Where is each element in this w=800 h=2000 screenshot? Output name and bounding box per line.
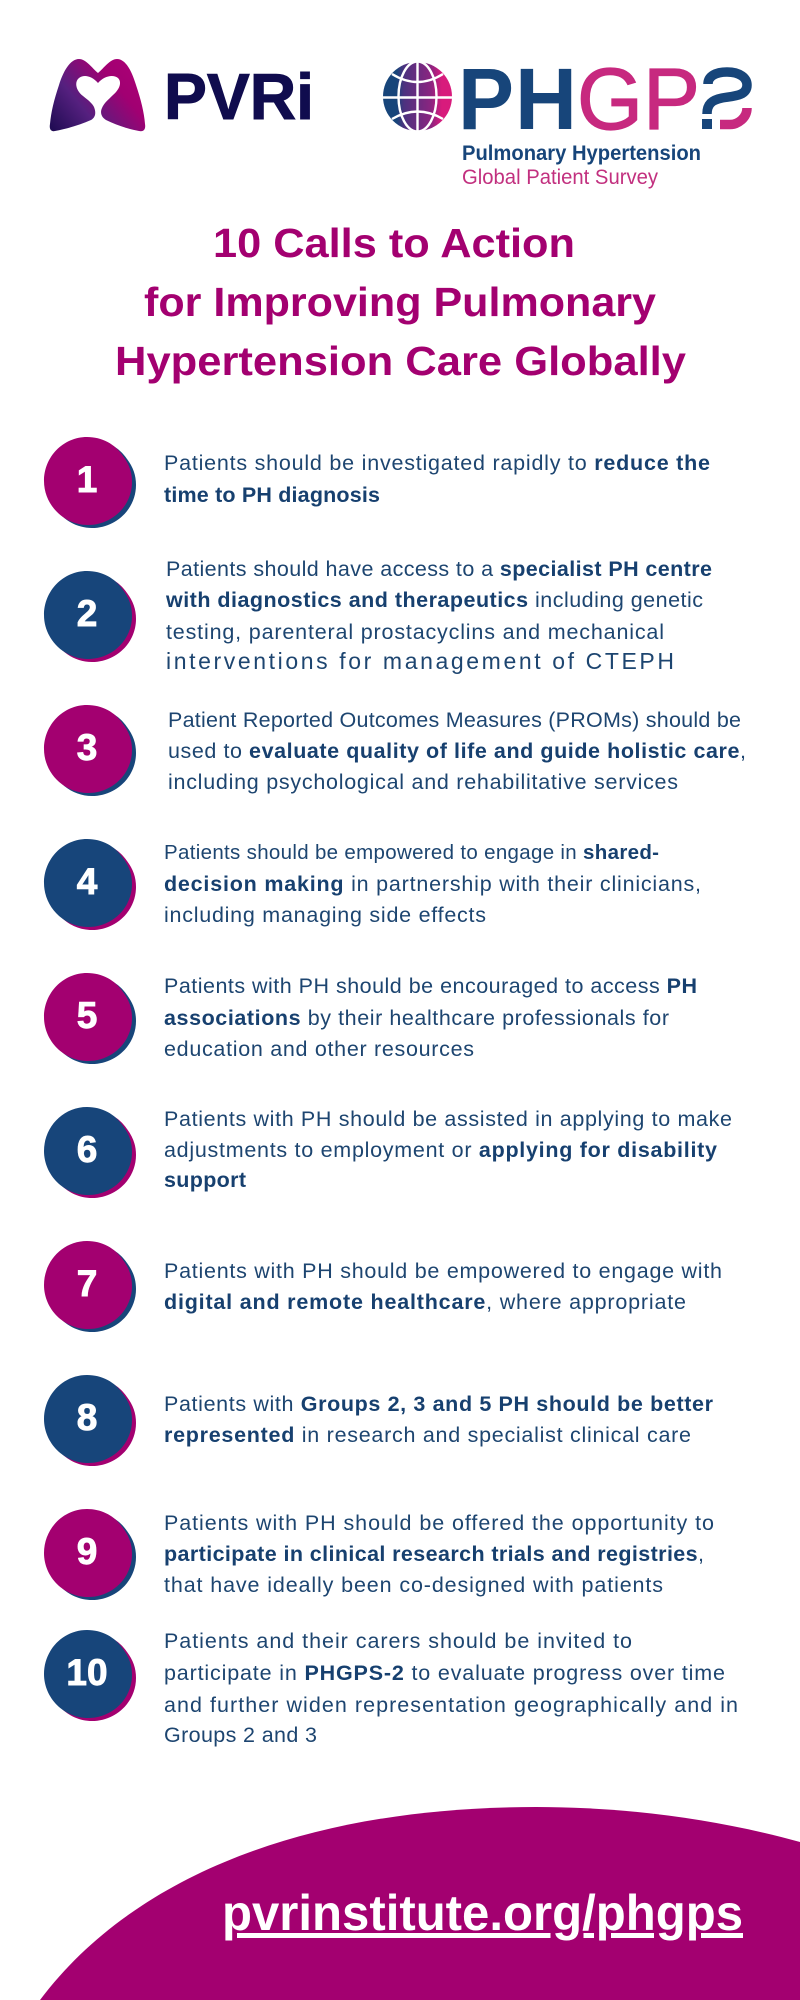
text 9 — [164, 1511, 714, 1597]
text 3: Patient Reported Outcomes Measures (PROMs) should be — [168, 708, 741, 732]
logo: PVRI: PVRi — [164, 60, 314, 133]
text 9: Patients with PH should be offered the opportunity to — [164, 1511, 714, 1535]
badge 5: 5 — [77, 995, 97, 1036]
call to action 7 — [44, 1241, 722, 1332]
text 5: associations by their healthcare professionals for — [164, 1006, 669, 1030]
text 4 — [164, 841, 701, 927]
badge 8 — [44, 1375, 136, 1466]
badge 10 — [44, 1630, 136, 1721]
call to action 9 — [44, 1509, 714, 1600]
text 3: used to evaluate quality of life and guide holistic care, — [168, 739, 746, 763]
text 6: support — [164, 1168, 246, 1192]
text 7 — [164, 1259, 722, 1314]
text 10: participate in PHGPS-2 to evaluate progress over time — [164, 1661, 725, 1685]
text 8: Patients with Groups 2, 3 and 5 PH should be better — [164, 1392, 714, 1416]
icon: stylised S — [702, 72, 747, 129]
badge 6 — [44, 1107, 136, 1198]
logo: PHGPS: Pulmonary Hypertension — [462, 142, 701, 165]
logo: PHGPS — [382, 51, 747, 189]
logo: PHGPS: Global Patient Survey — [462, 166, 658, 189]
badge 2 — [44, 571, 136, 662]
footer: URL: pvrinstitute.org/phgps — [222, 1885, 743, 1941]
badge 6: 6 — [77, 1129, 97, 1170]
text 10: Patients and their carers should be invited to — [164, 1629, 632, 1653]
text 3 — [168, 708, 746, 794]
text 2 — [165, 557, 712, 674]
text 6 — [164, 1107, 732, 1192]
text 1 — [164, 451, 710, 507]
text 9: participate in clinical research trials and registries, — [164, 1542, 704, 1566]
logo: PHGPS: G — [577, 51, 643, 148]
text 2: interventions for management of CTEPH — [166, 648, 674, 674]
logo: PVRI — [50, 59, 314, 133]
text 5: Patients with PH should be encouraged to access PH — [164, 974, 697, 998]
text 10: Groups 2 and 3 — [164, 1723, 317, 1747]
badge 3 — [44, 705, 136, 796]
text 3: including psychological and rehabilitative services — [168, 770, 678, 794]
badge 7: 7 — [77, 1263, 97, 1304]
logo: PHGPS: H — [515, 51, 577, 148]
badge 4 — [44, 839, 136, 930]
badge 8: 8 — [77, 1397, 97, 1438]
badge 4: 4 — [77, 861, 98, 902]
text 6: adjustments to employment or applying for disability — [164, 1138, 717, 1162]
text 8 — [164, 1392, 714, 1447]
text 7: digital and remote healthcare, where appropriate — [164, 1290, 686, 1314]
logo: PHGPS: P — [643, 51, 700, 148]
title: 10 Calls to Action — [213, 220, 575, 266]
title: for Improving Pulmonary — [144, 279, 656, 325]
text 6: Patients with PH should be assisted in applying to make — [164, 1107, 732, 1131]
badge 5 — [44, 973, 136, 1064]
text 5: education and other resources — [164, 1037, 474, 1061]
text 4: including managing side effects — [164, 903, 486, 927]
call to action 2 — [44, 557, 712, 674]
call to action 10 — [44, 1629, 738, 1747]
text 4: decision making in partnership with their clinicians, — [164, 872, 701, 896]
icon: globe — [382, 61, 453, 132]
text 2: Patients should have access to a specialist PH centre — [166, 557, 712, 581]
badge 1: 1 — [77, 459, 97, 500]
text 5 — [164, 974, 697, 1061]
text 1: time to PH diagnosis — [164, 483, 380, 507]
badge 7 — [44, 1241, 136, 1332]
call to action 8 — [44, 1375, 714, 1466]
text 8: represented in research and specialist clinical care — [164, 1423, 691, 1447]
call to action 5 — [44, 973, 697, 1064]
text 4: Patients should be empowered to engage in shared- — [164, 841, 659, 864]
logo: PHGPS: P — [458, 51, 514, 148]
call to action 4 — [44, 839, 701, 930]
badge 9 — [44, 1509, 136, 1600]
text 7: Patients with PH should be empowered to engage with — [164, 1259, 722, 1283]
text 9: that have ideally been co-designed with patients — [164, 1573, 663, 1597]
badge 1 — [44, 437, 136, 528]
text 1: Patients should be investigated rapidly to reduce the — [164, 451, 710, 475]
call to action 6 — [44, 1107, 732, 1198]
call to action 1 — [44, 437, 710, 528]
title — [115, 220, 686, 384]
badge 3: 3 — [77, 727, 97, 768]
text 2: testing, parenteral prostacyclins and mechanical — [166, 620, 664, 644]
call to action 3 — [44, 705, 746, 796]
badge 2: 2 — [77, 593, 97, 634]
footer: magenta curve — [40, 1807, 800, 2000]
text 2: with diagnostics and therapeutics including genetic — [165, 588, 703, 612]
text 10: and further widen representation geographically and in — [164, 1693, 738, 1717]
badge 9: 9 — [77, 1531, 97, 1572]
badge 10: 10 — [66, 1652, 108, 1693]
text 10 — [164, 1629, 738, 1747]
title: Hypertension Care Globally — [115, 338, 686, 384]
